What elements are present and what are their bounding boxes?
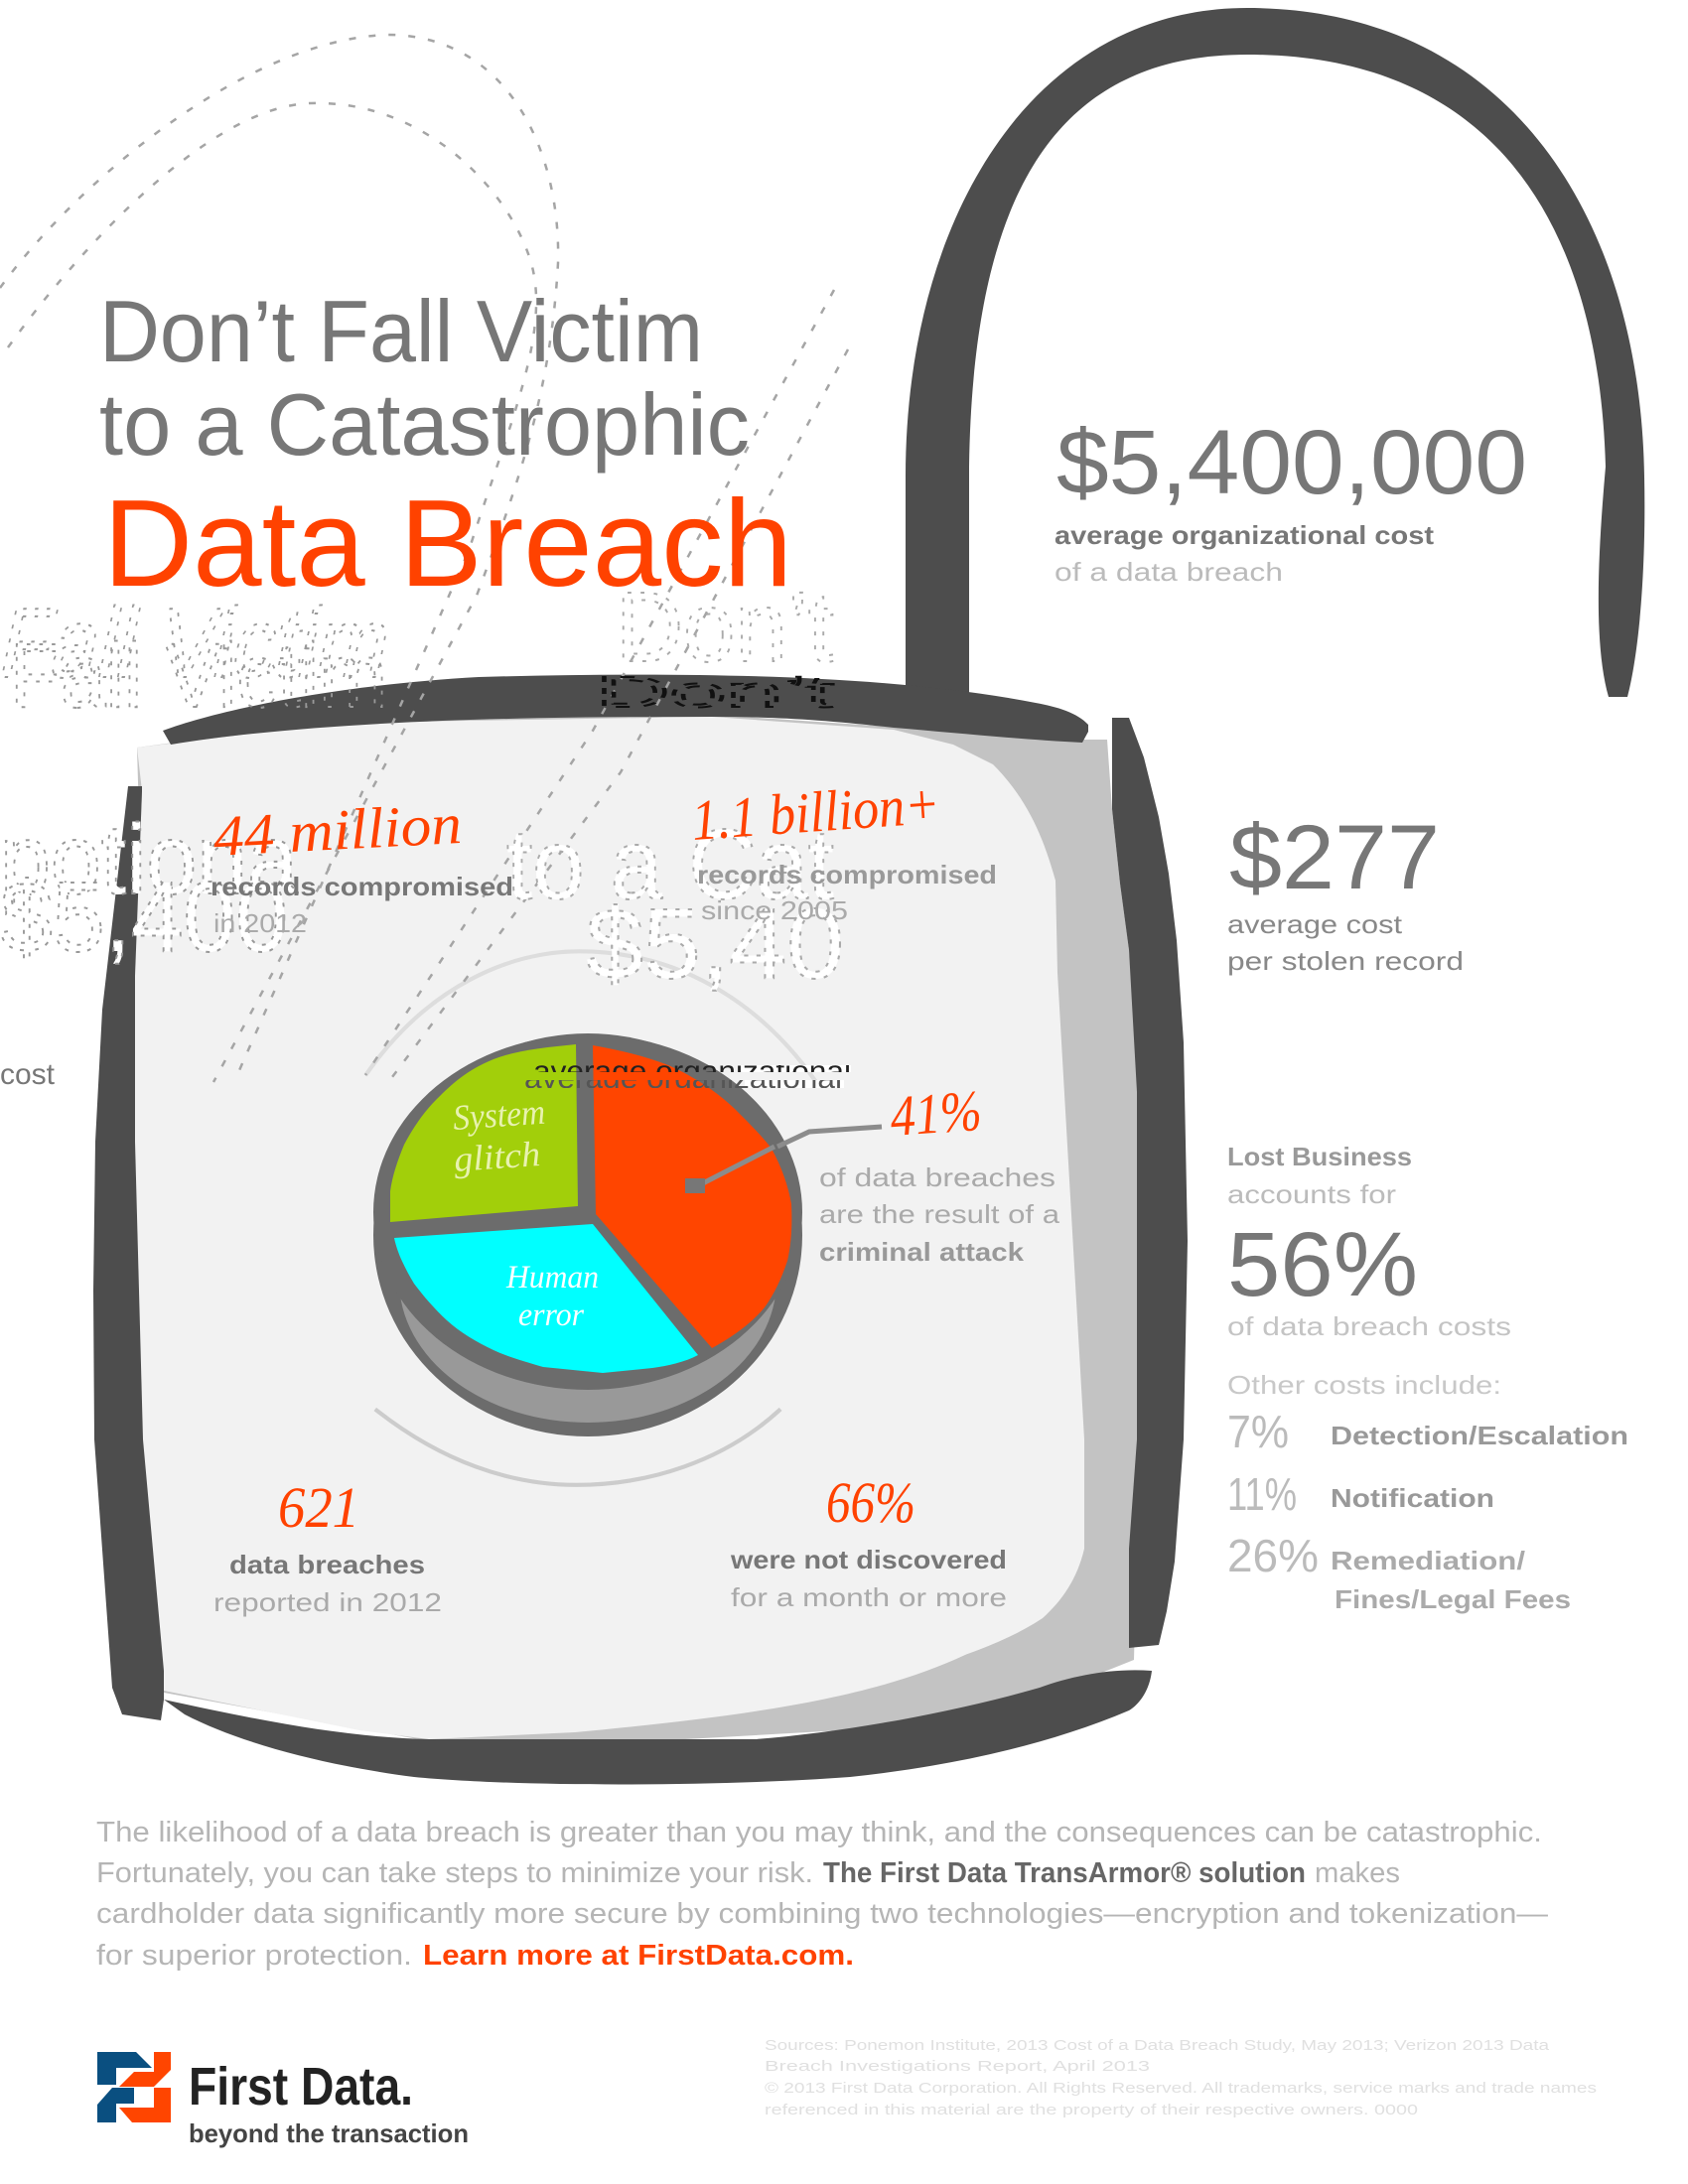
stat: 41%: of data breaches — [819, 1162, 1055, 1192]
title line 1: Don’t Fall Victim — [99, 282, 703, 380]
other costs list: 11% — [1227, 1468, 1297, 1520]
stat: 44 million: 44 million — [211, 791, 463, 869]
body paragraph: The likelihood of a data breach is greater than you may think, and the consequences can be catastrophic. — [96, 1817, 1542, 1848]
lock body panel — [93, 675, 1188, 1785]
fine print: © 2013 First Data Corporation. All Rights Reserved. All trademarks, service marks and trade names — [765, 2080, 1597, 2097]
pie leader hub — [685, 1178, 705, 1193]
stat: $277: average cost — [1227, 909, 1403, 939]
slice: criminal attack — [593, 1045, 791, 1348]
body paragraph: Fortunately, you can take steps to minimize your risk. — [96, 1857, 813, 1889]
stat: 1.1 billion+ — [689, 771, 997, 925]
body paragraph: The First Data TransArmor® solution — [823, 1857, 1306, 1889]
ghost: dashed text: potiona — [0, 804, 298, 915]
lock shackle — [906, 8, 1644, 697]
other costs list: Detection/Escalation — [1331, 1421, 1628, 1450]
stat: 44 million: records compromised — [211, 872, 513, 901]
lock frame: top bar — [163, 675, 1088, 745]
ghost: dashed text: Don’t — [596, 668, 834, 717]
body paragraph: makes — [1315, 1857, 1400, 1889]
stat: 621: reported in 2012 — [213, 1587, 442, 1617]
lock frame: bottom bar — [164, 1670, 1152, 1785]
stat: 621: data breaches — [229, 1550, 425, 1579]
other costs list — [1227, 1370, 1628, 1614]
stat: $277: per stolen record — [1227, 946, 1464, 976]
ghost: dashed arcs — [0, 35, 848, 1082]
ghost: dashed text: $5,40 — [586, 888, 844, 1000]
panel: light face — [135, 717, 1084, 1739]
stat: lost business 56% — [1227, 1142, 1511, 1341]
stat: $277: $277 — [1229, 807, 1440, 908]
slice: human error — [394, 1224, 698, 1373]
other costs list: 7% — [1227, 1406, 1289, 1457]
stat: 41%: criminal attack — [819, 1237, 1025, 1267]
ghost: dashed text — [0, 572, 851, 1095]
arc below pie — [375, 1409, 780, 1485]
stat: 66%: for a month or more — [731, 1582, 1007, 1612]
arc above pie — [365, 951, 816, 1082]
panel: right shadow — [137, 715, 1140, 1743]
fine print: referenced in this material are the property of their respective owners. 0000 — [765, 2102, 1418, 2118]
label: human error: Human — [505, 1260, 599, 1296]
body paragraph: Learn more at FirstData.com. — [423, 1940, 854, 1972]
label: system glitch — [452, 1092, 546, 1179]
logo wordmark: First Data. — [189, 2057, 413, 2116]
fine print: Breach Investigations Report, April 2013 — [765, 2058, 1150, 2075]
pie chart — [373, 1033, 882, 1436]
stat: 1.1 billion+: records compromised — [697, 860, 997, 889]
stat: 621: 621 — [278, 1475, 359, 1540]
stat: lost business 56%: Lost Business — [1227, 1142, 1412, 1171]
other costs list: Remediation/ — [1331, 1546, 1525, 1575]
title line 2: to a Catastrophic — [99, 375, 750, 474]
ghost: dashed text: to a Cat — [506, 809, 834, 920]
title line 3: Data Breach — [103, 476, 792, 613]
other costs list: Fines/Legal Fees — [1335, 1584, 1571, 1614]
body paragraph: for superior protection. — [96, 1940, 412, 1972]
stat: 66%: 66% — [826, 1470, 915, 1535]
label: human error: error — [518, 1297, 584, 1333]
stat: $277 — [1227, 807, 1464, 976]
ghost: dashed text: cost — [0, 1058, 56, 1091]
stat: $5,400,000: of a data breach — [1055, 557, 1283, 587]
lock frame: right bar — [1112, 718, 1188, 1648]
stat: $5,400,000: $5,400,000 — [1056, 412, 1527, 513]
fine print — [765, 2037, 1597, 2118]
ghost: dashed text: $5,400 — [0, 862, 288, 973]
ghost: dashed text: average organizational — [524, 1062, 842, 1095]
stat: 41%: are the result of a — [819, 1199, 1060, 1229]
stat: lost business 56%: accounts for — [1227, 1179, 1396, 1209]
body paragraph: cardholder data significantly more secure by combining two technologies—encryption and tokenization— — [96, 1898, 1548, 1930]
stat: $5,400,000 — [1055, 412, 1527, 587]
fine print: Sources: Ponemon Institute, 2013 Cost of a Data Breach Study, May 2013; Verizon 2013 Data — [765, 2037, 1550, 2054]
ghost: dashed text: Fall Victim — [0, 588, 401, 699]
pie top rim — [373, 1034, 802, 1390]
ghost: dashed text: average organizational — [533, 1055, 851, 1088]
pie side — [399, 1139, 776, 1423]
stat: lost business 56%: of data breach costs — [1227, 1311, 1511, 1341]
pie base — [373, 1033, 802, 1436]
stat: 44 million: in 2012 — [213, 908, 307, 938]
stat: $5,400,000: average organizational cost — [1055, 520, 1434, 550]
other costs list: 26% — [1227, 1530, 1319, 1581]
label: system glitch: glitch — [453, 1134, 541, 1179]
title — [99, 282, 792, 613]
logo wordmark — [189, 2057, 469, 2148]
logo wordmark: beyond the transaction — [189, 2118, 469, 2148]
slice: system glitch — [390, 1044, 578, 1222]
other costs list: Other costs include: — [1227, 1370, 1501, 1400]
stat: 41% — [819, 1078, 1060, 1267]
stat: 621 — [213, 1475, 442, 1617]
stat: 1.1 billion+: since 2005 — [701, 895, 848, 925]
icon: First Data logo mark — [97, 2052, 171, 2122]
label: human error — [505, 1260, 599, 1333]
label: system glitch: System — [452, 1092, 546, 1138]
body paragraph — [96, 1817, 1548, 1972]
ghost: dashed text: Don’t — [616, 572, 834, 683]
stat: 66% — [730, 1470, 1007, 1612]
lock frame: left bar — [93, 786, 164, 1720]
pie leader line — [697, 1127, 882, 1186]
ghost: dashed text: Fall Victim — [10, 625, 387, 727]
stat: 41%: 41% — [888, 1078, 984, 1149]
stat: 1.1 billion+: 1.1 billion+ — [689, 771, 941, 853]
stat: 44 million — [211, 791, 513, 938]
stat: 66%: were not discovered — [730, 1545, 1007, 1574]
other costs list: Notification — [1331, 1483, 1494, 1513]
stat: lost business 56%: 56% — [1227, 1214, 1418, 1315]
